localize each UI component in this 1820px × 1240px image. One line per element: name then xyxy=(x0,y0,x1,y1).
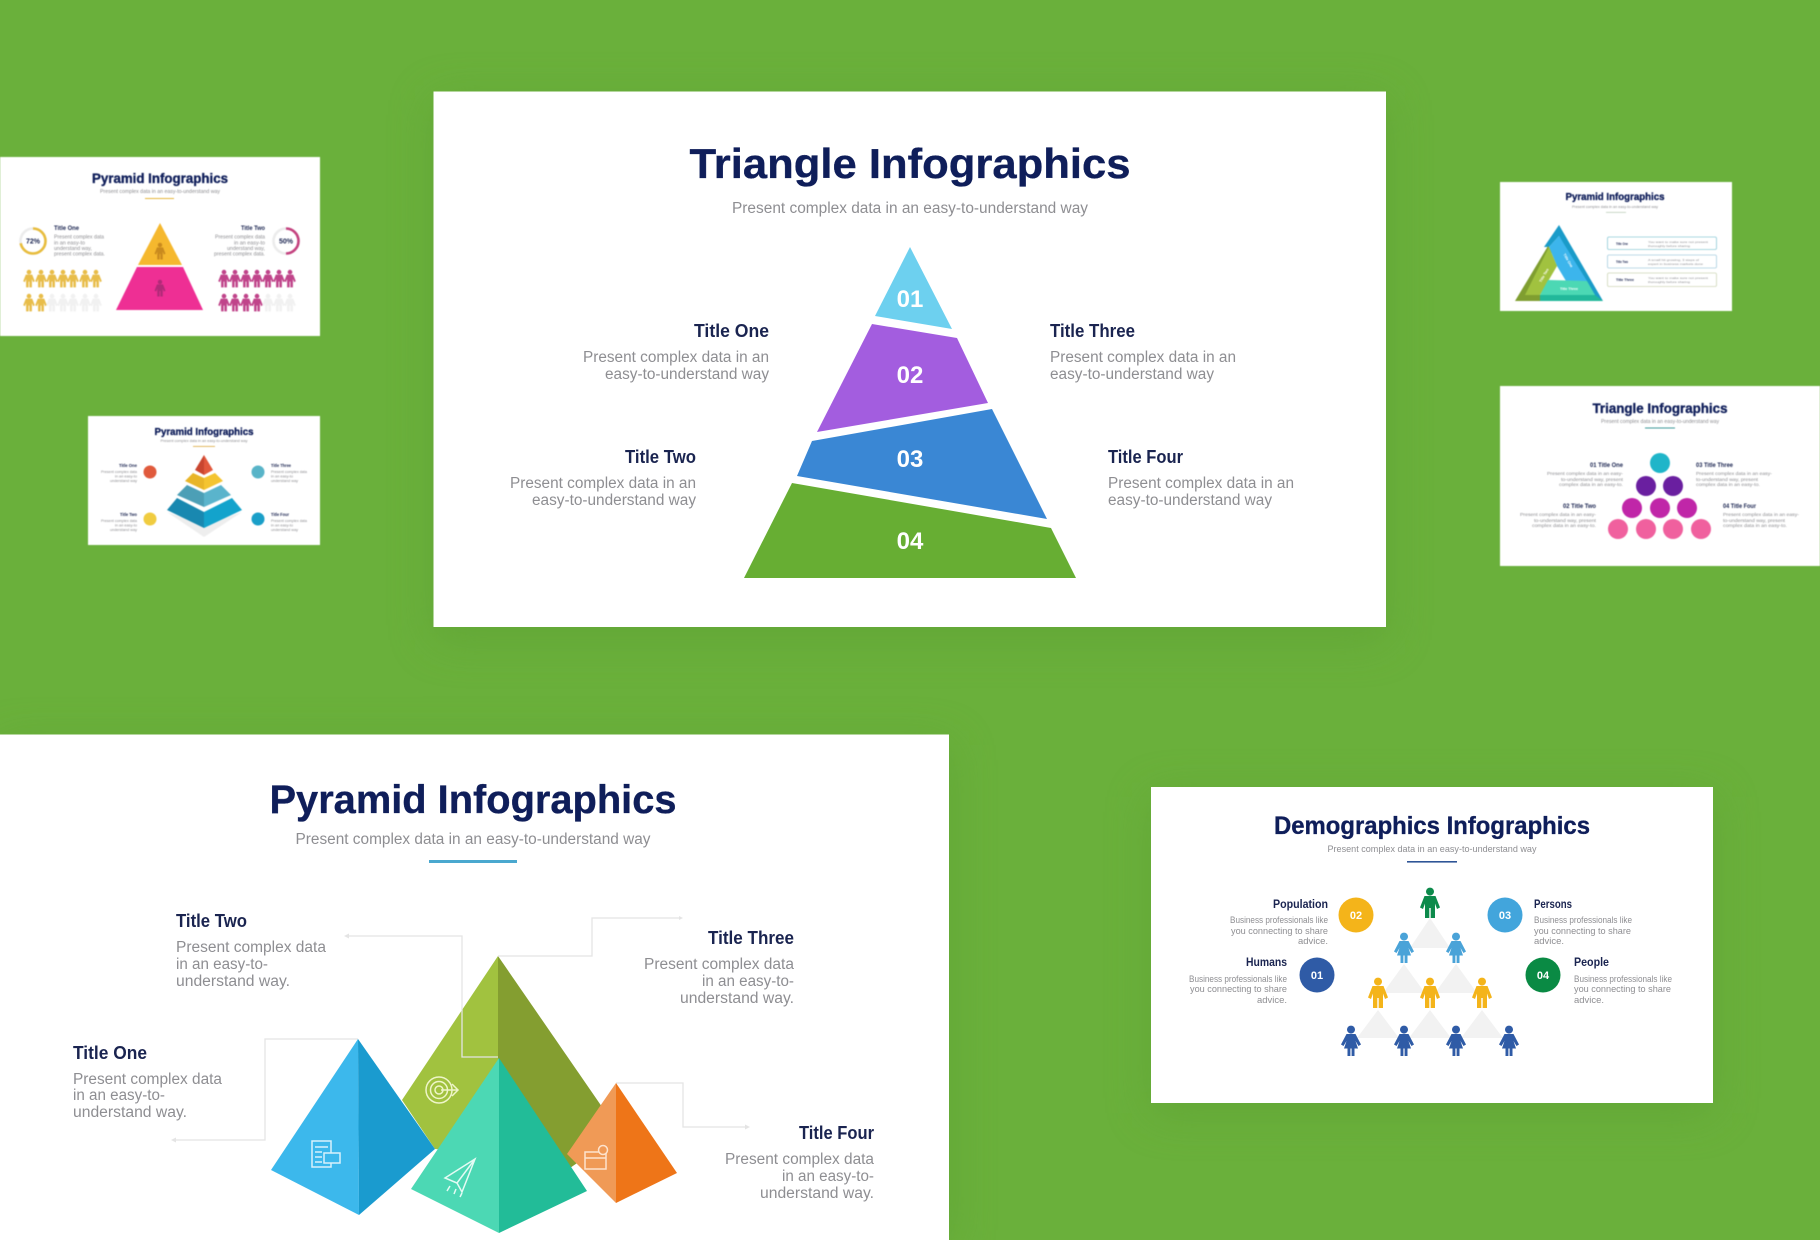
text: left column xyxy=(101,463,138,532)
icon: document xyxy=(312,1141,340,1167)
text: population xyxy=(1230,899,1328,947)
icon: card xyxy=(585,1146,608,1169)
text: 04 title four: 04 Title Four xyxy=(1723,504,1757,510)
text: title two: in an easy-to- xyxy=(176,956,268,973)
segmented triangle: Title Two xyxy=(1539,267,1550,283)
text: people xyxy=(1574,957,1672,1006)
tiered triangle chart: 02 xyxy=(897,362,923,389)
text: people: advice. xyxy=(1574,995,1604,1006)
icon: target xyxy=(426,1077,458,1103)
text: population: advice. xyxy=(1298,936,1328,947)
text: title three xyxy=(644,928,794,1007)
subtitle: Present complex data in an easy-to-understand way xyxy=(1601,419,1720,425)
panel: demographics infographics xyxy=(1151,787,1713,1103)
text: title four: in an easy-to- xyxy=(782,1168,874,1185)
text: title four xyxy=(725,1123,874,1202)
text: humans: Humans xyxy=(1246,957,1287,969)
text: left column: understand way xyxy=(110,528,137,532)
text: title two: understand way, xyxy=(227,246,265,252)
panel: dot triangle infographics (right) xyxy=(1500,386,1820,566)
text: title one: Present complex data in an xyxy=(583,349,769,366)
people icons: yellow xyxy=(23,270,102,311)
segmented triangle: Title One xyxy=(1562,253,1573,268)
text: right column: Present complex data xyxy=(271,470,307,474)
row: title two: expert in business markets done xyxy=(1648,262,1703,266)
badge 02 xyxy=(1338,898,1374,932)
text: title four: Present complex data in an xyxy=(1108,475,1294,492)
text: 02 title two xyxy=(1520,504,1597,529)
tiered triangle chart: 01 xyxy=(897,286,923,313)
text: title three: in an easy-to- xyxy=(702,973,794,990)
text: left column: Title One xyxy=(119,463,138,468)
connector: title one xyxy=(171,1039,358,1142)
text: right column: understand way xyxy=(271,479,298,483)
underline xyxy=(1407,861,1457,863)
text: 03 title three xyxy=(1696,463,1772,488)
text: title two xyxy=(176,911,326,990)
people pyramid xyxy=(1341,888,1519,1056)
text: title two: Title Two xyxy=(241,226,265,232)
text: title four: understand way. xyxy=(760,1185,874,1202)
text: title one: Present complex data xyxy=(73,1071,222,1088)
text: title three: understand way. xyxy=(680,990,794,1007)
subtitle: Present complex data in an easy-to-understand way xyxy=(100,189,221,195)
text: humans: you connecting to share xyxy=(1190,984,1287,995)
text: right column: Title Three xyxy=(271,463,292,468)
tiered triangle chart xyxy=(744,247,1076,578)
row: title three: thoroughly before sharing xyxy=(1648,280,1690,284)
text: 01 title one: 01 Title One xyxy=(1590,463,1624,469)
title: Triangle Infographics xyxy=(1592,401,1728,416)
segmented triangle: Title Three xyxy=(1560,287,1578,291)
underline xyxy=(1606,211,1626,214)
text: title two: Present complex data in an xyxy=(510,475,696,492)
title: Pyramid Infographics xyxy=(1566,191,1665,203)
underline xyxy=(429,860,517,863)
subtitle: Present complex data in an easy-to-understand way xyxy=(732,200,1088,217)
text: left column: in an easy-to xyxy=(115,474,137,478)
ring: 72%: 72% xyxy=(26,238,41,246)
text: 01 title one: to-understand way, present xyxy=(1561,477,1624,483)
row: title two xyxy=(1608,255,1716,268)
text: title three: easy-to-understand way xyxy=(1050,366,1214,383)
text: 04 title four: complex data in an easy-to. xyxy=(1723,523,1787,529)
text: title one: in an easy-to- xyxy=(73,1087,165,1104)
text: people: Business professionals like xyxy=(1574,974,1672,985)
subtitle: Present complex data in an easy-to-understand way xyxy=(296,831,651,848)
connector: title two xyxy=(344,934,498,1057)
text: title two xyxy=(510,447,696,509)
connector: title three xyxy=(498,916,683,956)
text: title two: Title Two xyxy=(176,911,247,931)
row: title two: A small hit growing, 3 steps of xyxy=(1648,258,1699,262)
text: title one: understand way. xyxy=(73,1104,187,1121)
title: Demographics Infographics xyxy=(1274,812,1590,840)
text: title three: Present complex data xyxy=(644,956,794,973)
text: 02 title two: Present complex data in an easy- xyxy=(1520,512,1596,518)
text: right column: understand way xyxy=(271,528,298,532)
text: right column: in an easy-to xyxy=(271,524,293,528)
ring: 50%: 50% xyxy=(279,238,294,246)
text: persons: Business professionals like xyxy=(1534,915,1632,926)
pyramid: orange xyxy=(567,1083,677,1203)
row: title three: Title Three xyxy=(1616,277,1635,282)
text: title one: easy-to-understand way xyxy=(605,366,769,383)
text: 03 title three: Present complex data in an easy- xyxy=(1696,471,1772,477)
row: title one xyxy=(1608,237,1716,250)
badge 02: 02 xyxy=(1350,910,1362,922)
text: title three: Present complex data in an xyxy=(1050,349,1236,366)
text: title three: Title Three xyxy=(1050,321,1135,341)
pyramid: teal xyxy=(411,1058,587,1233)
segmented triangle xyxy=(1515,225,1603,301)
text: 01 title one: complex data in an easy-to. xyxy=(1559,482,1623,488)
badge 04 xyxy=(1526,958,1560,992)
text: people: you connecting to share xyxy=(1574,984,1671,995)
underline xyxy=(193,445,215,448)
text: title two: present complex data. xyxy=(214,252,265,258)
title: Pyramid Infographics xyxy=(154,426,254,438)
text: title two: easy-to-understand way xyxy=(532,492,696,509)
text: humans: Business professionals like xyxy=(1189,974,1287,985)
text: title two: understand way. xyxy=(176,973,290,990)
badge 03 xyxy=(1488,898,1522,932)
dot triangle xyxy=(1608,453,1711,539)
text: humans xyxy=(1189,957,1287,1006)
text: right column: Title Four xyxy=(271,512,289,517)
text: title one: understand way, xyxy=(54,246,92,252)
badge 01 xyxy=(1300,958,1334,992)
text: 02 title two: to-understand way, present xyxy=(1534,518,1597,524)
underline xyxy=(1645,428,1675,429)
text: population: you connecting to share xyxy=(1231,926,1328,937)
title: Pyramid Infographics xyxy=(92,171,228,186)
text: population: Population xyxy=(1273,899,1328,911)
layered pyramid xyxy=(167,455,242,537)
text: title one: Present complex data xyxy=(54,234,104,240)
text: 02 title two: 02 Title Two xyxy=(1563,504,1596,510)
text: right column: in an easy-to xyxy=(271,474,293,478)
text: title four: Title Four xyxy=(1108,447,1183,467)
text: title one: in an easy-to xyxy=(54,240,85,246)
badge 03: 03 xyxy=(1499,910,1511,922)
pyramid: green xyxy=(402,956,620,1175)
text: title four xyxy=(1108,447,1294,509)
text: title one: Title One xyxy=(54,226,80,232)
text: 04 title four: Present complex data in an easy- xyxy=(1723,512,1799,518)
text: title three: Title Three xyxy=(708,928,794,948)
panel: triangle infographics (main) xyxy=(434,92,1386,627)
row: title one: thoroughly before sharing xyxy=(1648,244,1690,248)
background triangles xyxy=(1357,918,1503,1038)
pyramid two tiers xyxy=(116,223,203,310)
text: title one: Title One xyxy=(694,321,769,341)
text: 04 title four xyxy=(1723,504,1799,529)
underline xyxy=(145,198,174,199)
text: title two: Title Two xyxy=(625,447,696,467)
title: Pyramid Infographics xyxy=(270,778,676,822)
subtitle: Present complex data in an easy-to-understand way xyxy=(160,439,248,443)
text: persons: advice. xyxy=(1534,936,1564,947)
text: 03 title three: to-understand way, present xyxy=(1696,477,1759,483)
panel: triangle cycle pyramid (top right) xyxy=(1500,182,1732,311)
text: title two xyxy=(214,226,265,258)
connector: title four xyxy=(616,1083,750,1130)
panel: pyramid infographics (bottom left) xyxy=(0,734,949,1240)
tiered triangle chart: 04 xyxy=(897,528,924,555)
ring: 50% xyxy=(274,228,298,254)
text: title two: in an easy-to xyxy=(234,240,265,246)
text: 02 title two: complex data in an easy-to. xyxy=(1532,523,1596,529)
row: title one: Title One xyxy=(1616,241,1629,246)
text: right column xyxy=(271,463,307,532)
badges xyxy=(144,466,264,526)
badge 04: 04 xyxy=(1537,970,1550,982)
text: left column: Present complex data xyxy=(101,519,137,523)
ring: 72% xyxy=(20,228,46,254)
text: left column: Present complex data xyxy=(101,470,137,474)
text: persons xyxy=(1534,899,1632,947)
text: persons: Persons xyxy=(1534,899,1572,911)
text: 03 title three: complex data in an easy-to. xyxy=(1696,482,1760,488)
text: 03 title three: 03 Title Three xyxy=(1696,463,1734,469)
tiered triangle chart: 03 xyxy=(897,446,923,473)
text: 04 title four: to-understand way, present xyxy=(1723,518,1786,524)
row: title three: You want to make sure not present xyxy=(1648,276,1708,280)
text: title four: easy-to-understand way xyxy=(1108,492,1272,509)
text: left column: Title Two xyxy=(120,512,137,517)
subtitle: Present complex data in an easy-to-understand way xyxy=(1572,205,1658,209)
text: left column: understand way xyxy=(110,479,137,483)
people icons: pink xyxy=(218,270,296,311)
row: title one: You want to make sure not present xyxy=(1648,240,1708,244)
text: title one xyxy=(583,321,769,383)
text: left column: in an easy-to xyxy=(115,524,137,528)
text: title four: Title Four xyxy=(799,1123,874,1143)
text: title one xyxy=(73,1043,222,1121)
text: right column: Present complex data xyxy=(271,519,307,523)
text: title one xyxy=(54,226,105,258)
subtitle: Present complex data in an easy-to-understand way xyxy=(1328,844,1537,855)
panel: layered pyramid infographics (left) xyxy=(88,416,320,545)
text: persons: you connecting to share xyxy=(1534,926,1631,937)
row: title three xyxy=(1608,273,1716,286)
text: 01 title one: Present complex data in an easy- xyxy=(1547,471,1623,477)
text: title two: Present complex data xyxy=(215,234,265,240)
badge 01: 01 xyxy=(1311,970,1323,982)
pyramid: blue xyxy=(271,1039,435,1215)
icon: paper plane xyxy=(445,1159,475,1197)
text: humans: advice. xyxy=(1257,995,1287,1006)
text: title one: Title One xyxy=(73,1043,147,1063)
title: Triangle Infographics xyxy=(690,140,1130,187)
text: 01 title one xyxy=(1547,463,1624,488)
text: people: People xyxy=(1574,957,1609,969)
text: title four: Present complex data xyxy=(725,1151,874,1168)
row: title two: Title Two xyxy=(1616,259,1628,264)
panel: pyramid infographics with percentages (top left) xyxy=(0,157,320,336)
text: title three xyxy=(1050,321,1236,383)
text: title one: present complex data. xyxy=(54,252,105,258)
text: title two: Present complex data xyxy=(176,939,326,956)
text: population: Business professionals like xyxy=(1230,915,1328,926)
